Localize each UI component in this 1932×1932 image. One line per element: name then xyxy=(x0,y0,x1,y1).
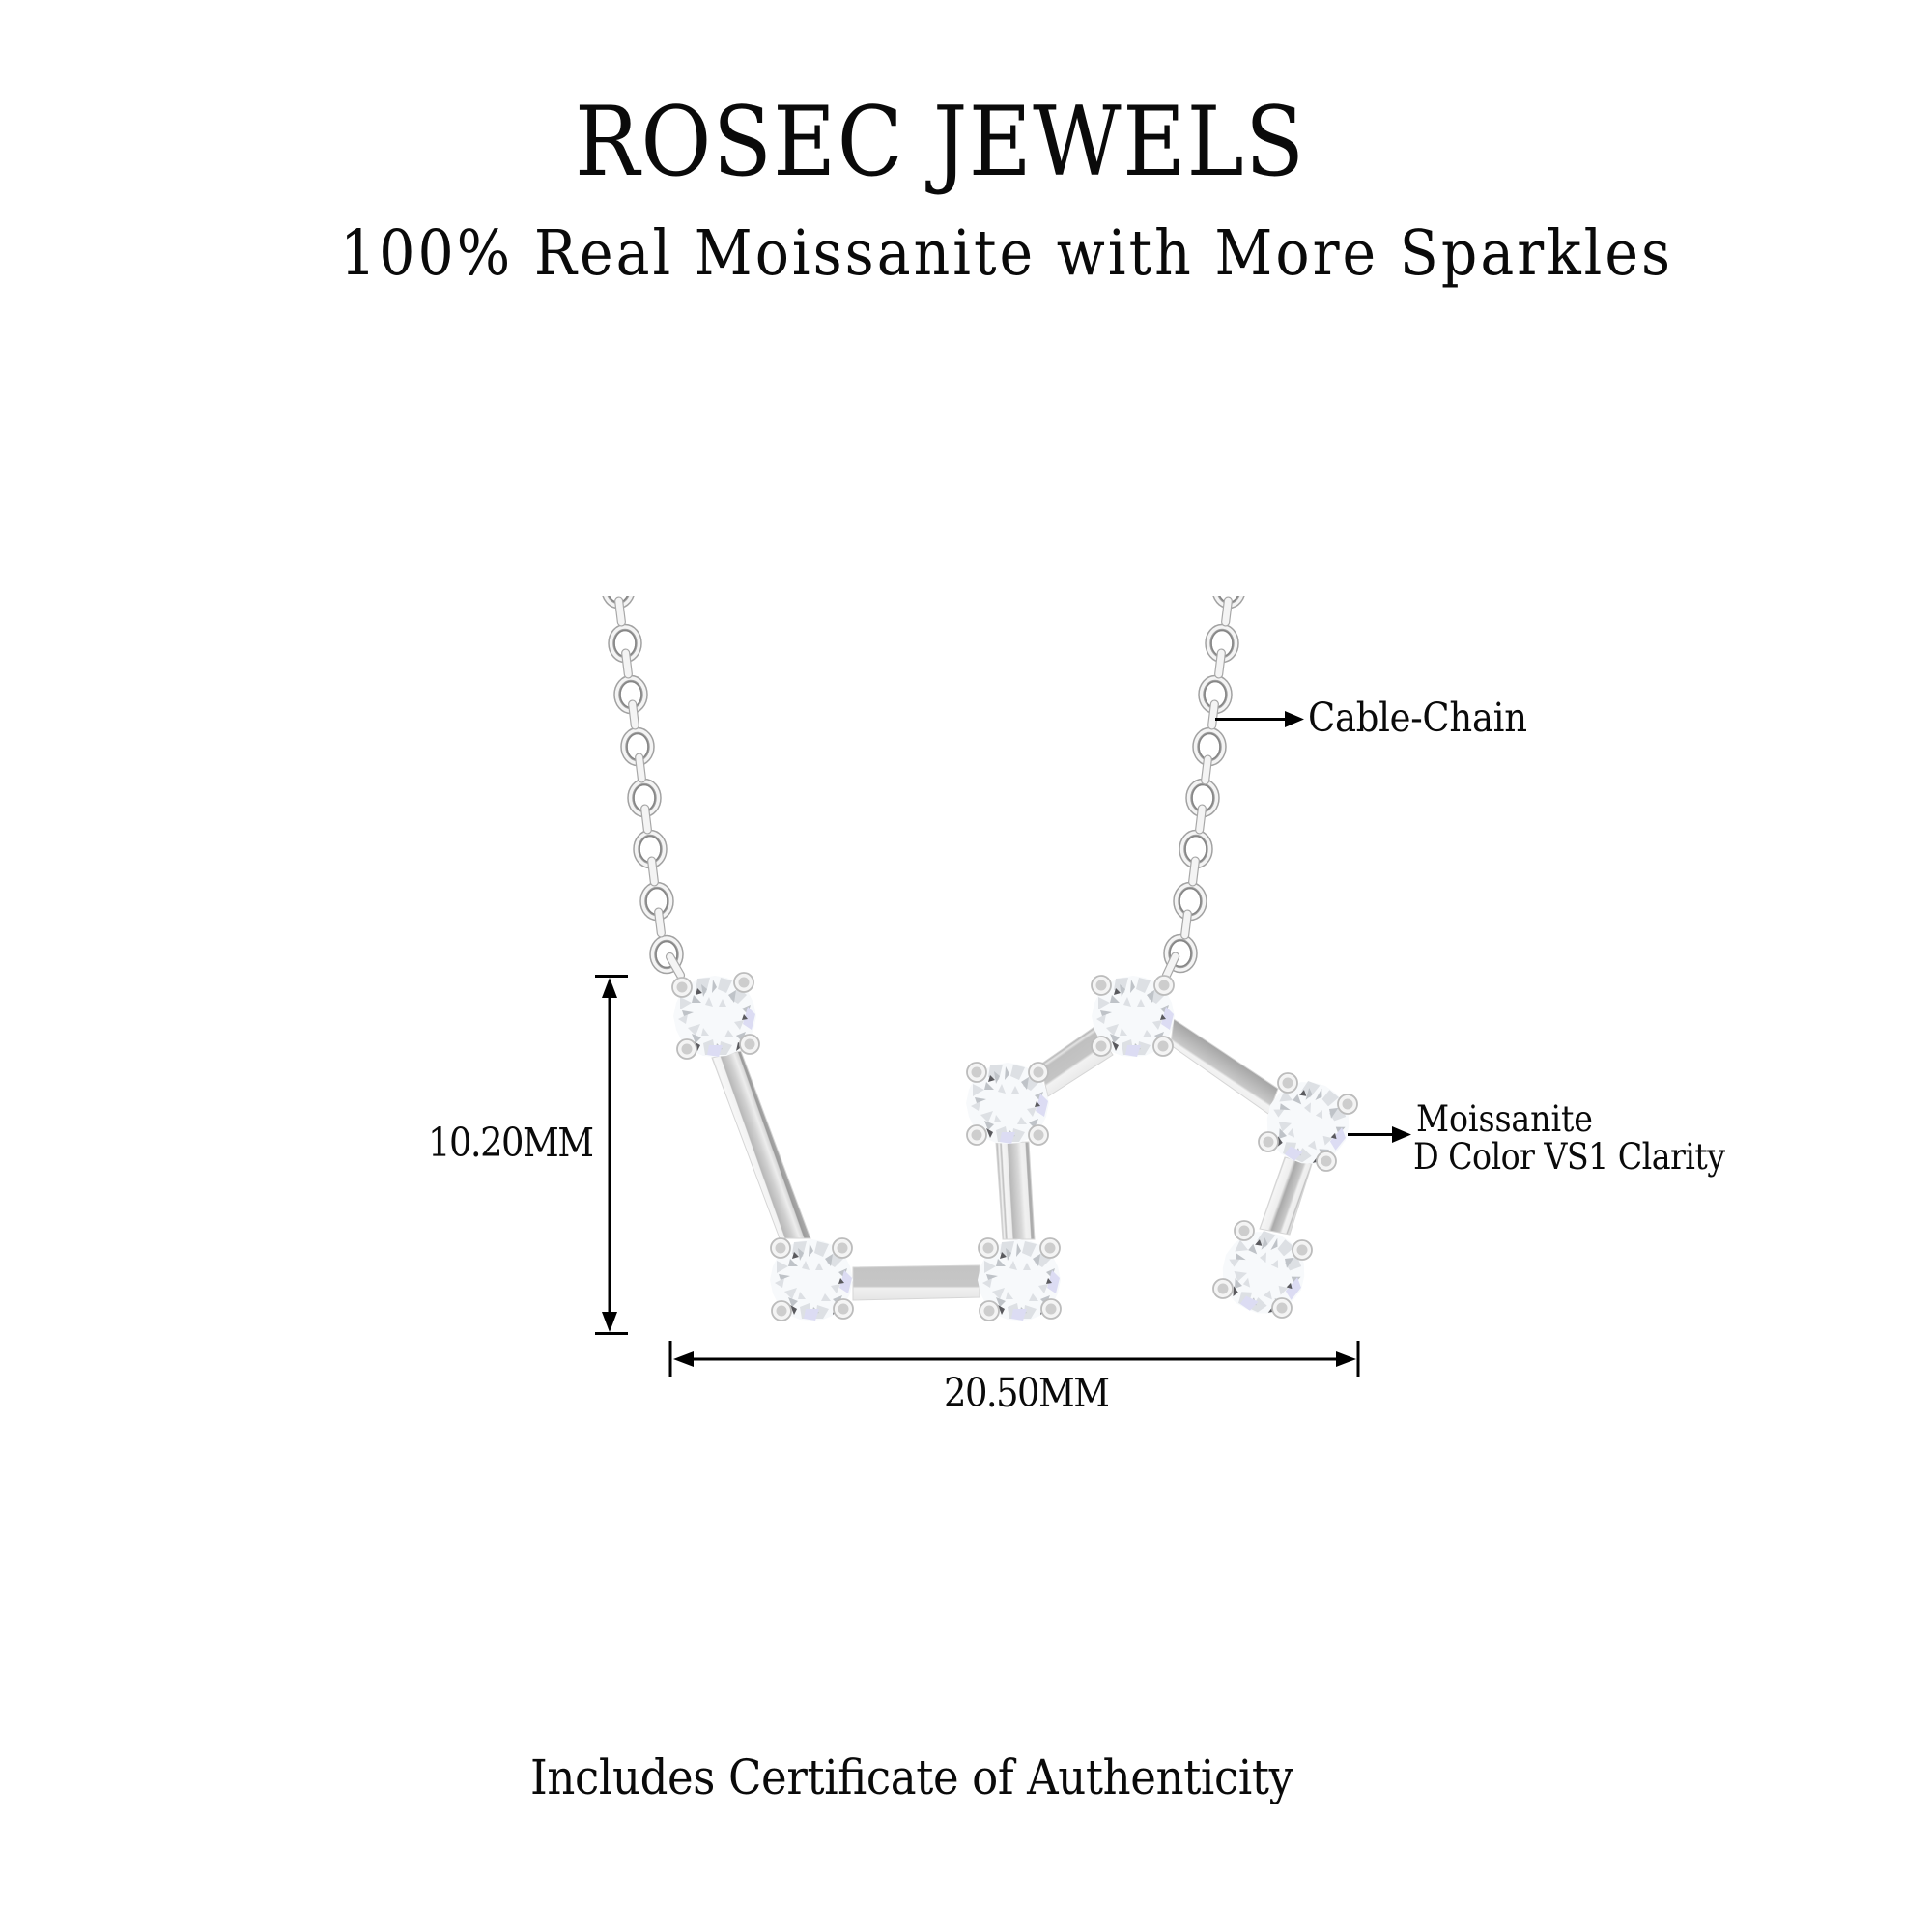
arrow: moissanite xyxy=(1348,1126,1411,1143)
height arrow xyxy=(595,975,628,1335)
footer note: Includes Certificate of Authenticity xyxy=(530,1749,1294,1805)
label: moissanite: Moissanite xyxy=(1416,1098,1593,1140)
right chain xyxy=(1161,573,1242,980)
left chain xyxy=(605,573,686,980)
gem 7 xyxy=(1208,1218,1319,1326)
gem 1 xyxy=(672,973,759,1059)
constellation bars xyxy=(712,1019,1312,1300)
callout: moissanite xyxy=(1348,1098,1725,1178)
width arrow xyxy=(668,1341,1360,1377)
gem 6 xyxy=(1253,1068,1363,1177)
label: cable chain: Cable-Chain xyxy=(1308,695,1527,741)
label: color and clarity: D Color VS1 Clarity xyxy=(1413,1136,1725,1178)
gem 3 xyxy=(978,1238,1061,1321)
gem 4 xyxy=(966,1063,1049,1145)
width value: 20.50MM xyxy=(944,1370,1110,1416)
gem 2 xyxy=(770,1238,853,1321)
dimension: width xyxy=(668,1341,1360,1416)
callout: cable chain xyxy=(1215,695,1527,741)
dimension: height xyxy=(428,975,628,1335)
subtitle: 100% Real Moissanite with More Sparkles xyxy=(340,217,1670,290)
necklace illustration xyxy=(605,573,1363,1326)
gem 5 xyxy=(1092,976,1175,1057)
arrow: cable chain xyxy=(1215,711,1304,727)
title: ROSEC JEWELS xyxy=(575,87,1304,198)
height value: 10.20MM xyxy=(428,1120,594,1166)
